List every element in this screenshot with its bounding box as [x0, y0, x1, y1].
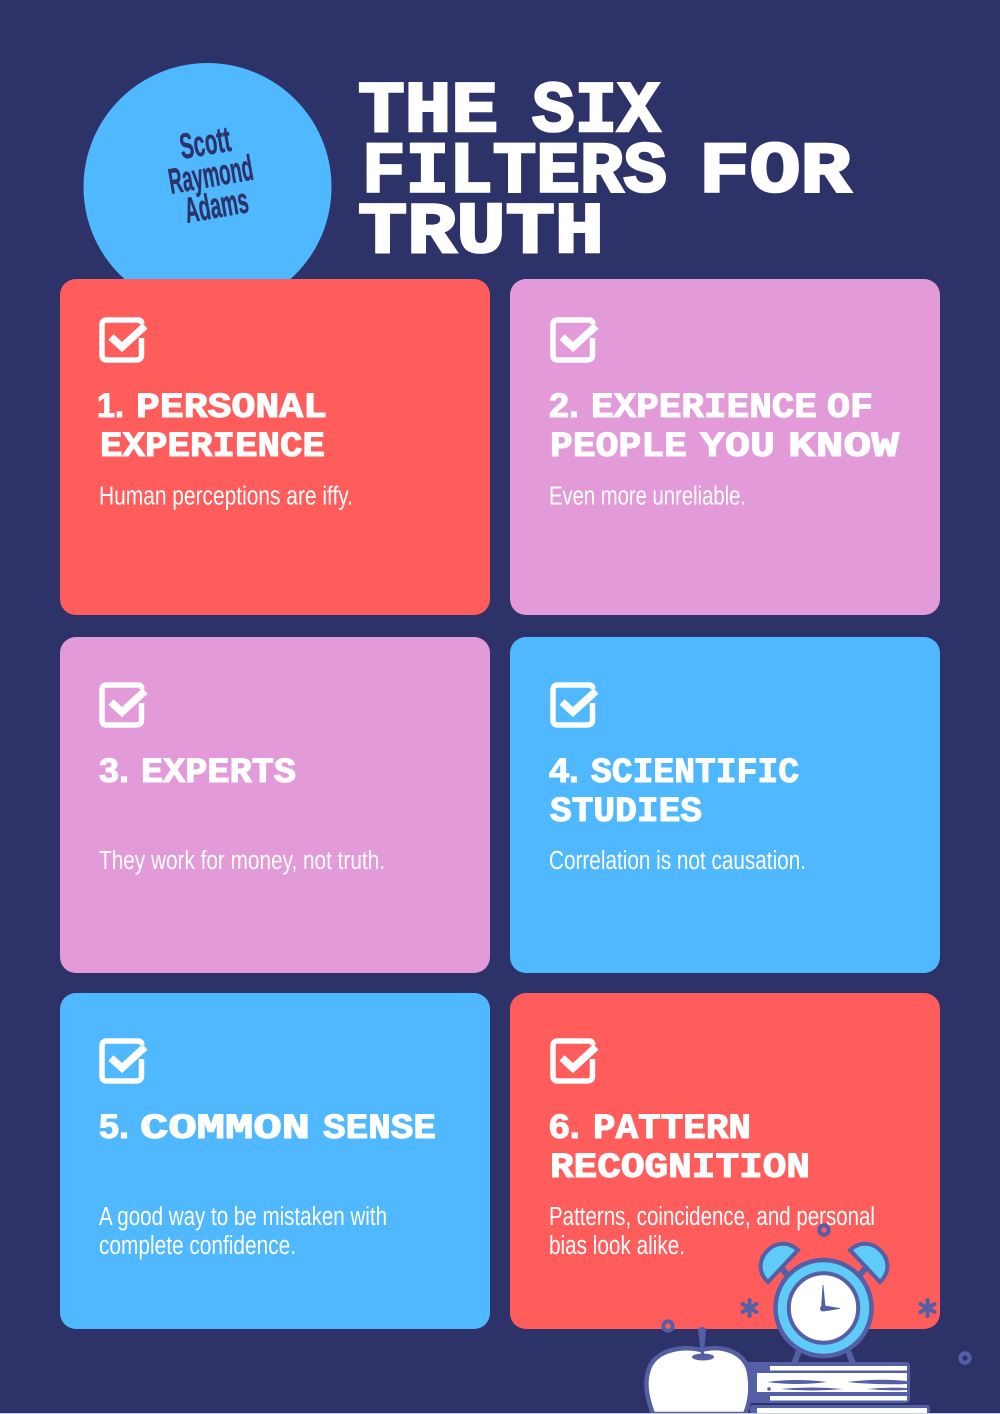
heading: experts: EXPERTS [141, 753, 296, 793]
icon: checkbox [102, 1041, 145, 1081]
body text: bias look alike. [549, 1232, 685, 1260]
heading: experience of people you know: 2. [549, 387, 579, 425]
heading: common sense: COMMON [140, 1109, 310, 1149]
panel: 3 experts [60, 637, 490, 973]
heading: common sense: SENSE [323, 1109, 436, 1149]
heading: experts: 3. [99, 752, 129, 790]
panel: 6 pattern recognition [510, 993, 940, 1329]
panel: 5 common sense [60, 993, 490, 1329]
heading: experience of people you know: PEOPLE [550, 427, 687, 467]
title: FOR [699, 132, 852, 214]
heading: pattern recognition: 6. [549, 1108, 580, 1146]
icon: alarm clock [761, 1244, 887, 1364]
illustration: clock, books and apple [646, 1225, 970, 1414]
heading: scientific studies: SCIENTIFIC [591, 753, 799, 793]
heading: common sense: 5. [99, 1108, 129, 1146]
panel: 1 personal experience [60, 279, 490, 615]
heading: personal experience [97, 387, 327, 467]
heading: pattern recognition: RECOGNITION [550, 1148, 810, 1188]
body text: Human perceptions are iffy. [99, 482, 353, 510]
icon: checkbox [553, 320, 596, 360]
heading: common sense [99, 1108, 436, 1149]
icon: stacked books [742, 1362, 930, 1414]
heading: experience of people you know [549, 387, 899, 467]
icon: checkbox [102, 320, 145, 360]
panel: 2 experience of people you know [510, 279, 940, 615]
title: SIX [532, 71, 661, 153]
heading: experience of people you know: EXPERIENCE [591, 388, 817, 428]
heading: scientific studies: STUDIES [550, 792, 702, 832]
body text: They work for money, not truth. [99, 847, 385, 875]
heading: scientific studies [549, 752, 799, 832]
heading: pattern recognition: PATTERN [593, 1109, 751, 1149]
body text: complete confidence. [99, 1232, 296, 1260]
title: FILTERS [362, 132, 667, 214]
heading: pattern recognition [549, 1108, 810, 1188]
panel: 4 scientific studies [510, 637, 940, 973]
heading: personal experience: 1. [97, 387, 124, 425]
author badge circle: Raymond [165, 147, 256, 202]
author badge circle: Adams [181, 179, 251, 231]
icon: checkbox [553, 1041, 596, 1081]
body text: Patterns, coincidence, and personal [549, 1203, 875, 1231]
heading: scientific studies: 4. [549, 752, 579, 790]
author badge circle: Scott [177, 118, 234, 167]
title [358, 71, 852, 274]
icon: checkbox [553, 685, 596, 725]
title: THE [358, 71, 498, 153]
heading: experience of people you know: OF [827, 388, 873, 428]
heading: personal experience: PERSONAL [136, 388, 327, 428]
body text [99, 1203, 387, 1260]
heading: personal experience: EXPERIENCE [100, 427, 325, 467]
body text: A good way to be mistaken with [99, 1203, 387, 1231]
author badge circle [84, 63, 332, 311]
body text: Even more unreliable. [549, 482, 746, 510]
icon: checkbox [102, 685, 145, 725]
heading: experience of people you know: YOU [700, 427, 775, 467]
body text: Correlation is not causation. [549, 847, 806, 875]
icon: apple [646, 1327, 750, 1414]
decorative small rings and stars [663, 1225, 970, 1363]
body text [549, 1203, 875, 1260]
title: TRUTH [358, 192, 604, 274]
heading: experience of people you know: KNOW [788, 427, 899, 467]
